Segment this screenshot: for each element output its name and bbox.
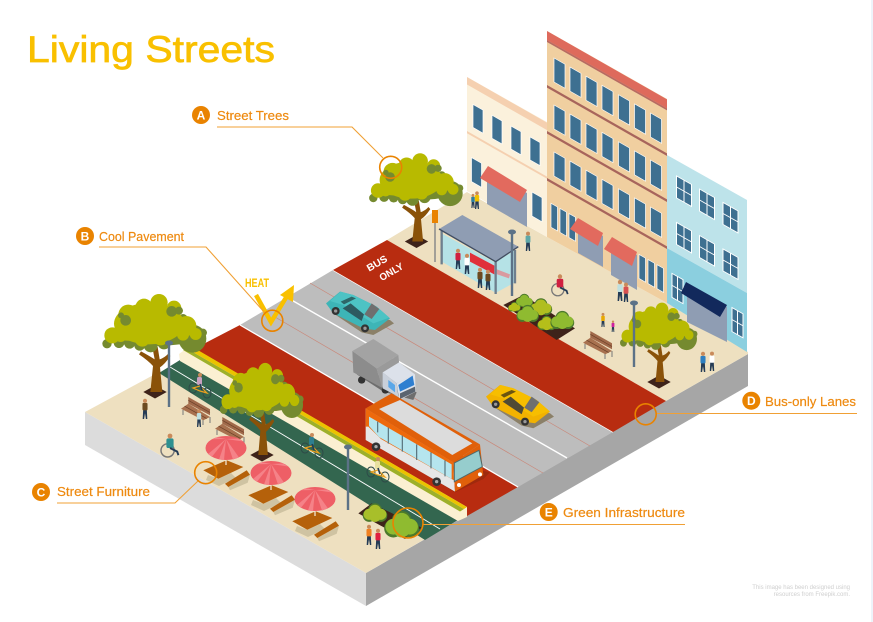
image credit: resources from Freepik.com. <box>774 592 850 598</box>
tree lower left <box>102 294 207 398</box>
platform base <box>85 354 748 606</box>
benches <box>181 331 612 445</box>
road marking: bus only: BUS <box>365 254 390 274</box>
callout E: green infrastructure <box>393 503 685 538</box>
truck <box>352 339 417 400</box>
tree A <box>369 153 463 248</box>
green infrastructure planter: lower <box>358 503 422 539</box>
building: cream <box>467 77 547 237</box>
callout B: cool pavement: B <box>81 230 90 244</box>
bus stop sign <box>432 210 438 262</box>
lower sidewalk <box>85 372 425 573</box>
callout E: green infrastructure: Green Infrastructure <box>563 505 685 520</box>
bus shelter <box>439 215 518 294</box>
callout C: street furniture: C <box>37 486 46 500</box>
tree upper right <box>620 303 697 388</box>
heat arrow <box>245 276 294 322</box>
callout C: street furniture: Street Furniture <box>57 484 150 499</box>
upper sidewalk <box>387 192 748 401</box>
callout A: street trees: Street Trees <box>217 108 290 123</box>
bus <box>366 393 490 492</box>
picnic tables with umbrellas <box>203 436 339 541</box>
bike lane <box>159 360 458 540</box>
road marking: bus only: ONLY <box>378 261 406 284</box>
callout C: street furniture <box>32 462 217 503</box>
cool pavement road <box>240 270 613 487</box>
curb strip <box>179 346 467 521</box>
background edge <box>871 0 873 622</box>
callout D: bus-only lanes <box>635 392 857 425</box>
heat arrow: HEAT <box>245 276 270 290</box>
callout B: cool pavement: Cool Pavement <box>99 229 184 244</box>
callout E: green infrastructure: E <box>545 506 553 520</box>
green infrastructure planter: upper <box>503 294 575 340</box>
bus lane: lower <box>188 325 518 516</box>
callout A: street trees <box>192 106 402 178</box>
vehicles layered over road <box>326 292 554 492</box>
image credit: This image has been designed using <box>752 585 850 591</box>
callout D: bus-only lanes: D <box>747 394 756 408</box>
bus lane: upper <box>333 240 666 432</box>
car: teal <box>326 292 394 335</box>
callout B: cool pavement <box>76 227 283 331</box>
callout D: bus-only lanes: Bus-only Lanes <box>765 394 856 409</box>
callout A: street trees: A <box>197 108 206 122</box>
building: blue <box>667 155 747 352</box>
tree lower middle <box>220 363 304 462</box>
street lamps <box>165 230 638 510</box>
people <box>142 191 714 549</box>
title: Living Streets <box>27 28 275 70</box>
road marking: bus only <box>365 254 406 284</box>
building: tan <box>547 31 667 303</box>
image credit <box>752 585 850 598</box>
car: taxi <box>486 385 554 428</box>
